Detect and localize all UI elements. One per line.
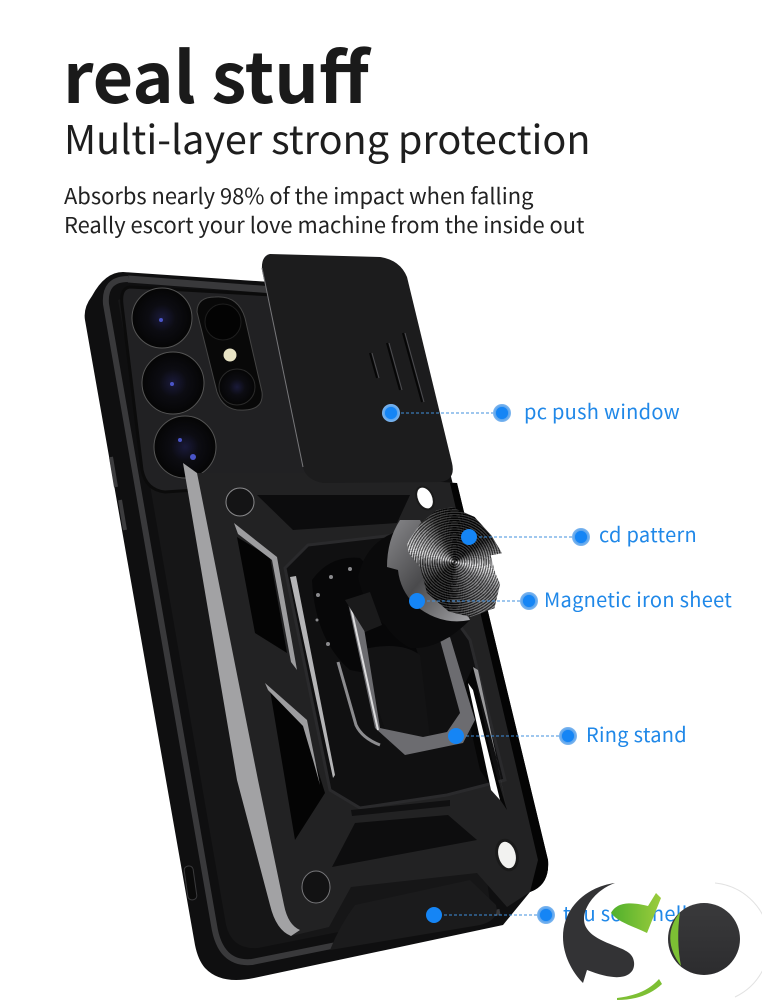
logo letter S xyxy=(563,883,634,983)
callout: pc push window: pc push window xyxy=(524,396,680,425)
trapezoid with hex pattern xyxy=(332,815,477,867)
side port xyxy=(184,865,197,900)
silver cap xyxy=(387,520,470,621)
callout: pc push window xyxy=(382,396,680,425)
logo green crescent xyxy=(670,912,681,966)
lens 3 xyxy=(154,416,216,478)
callout: ring stand xyxy=(448,719,687,748)
lens 2 xyxy=(142,352,204,414)
watermark logo xyxy=(563,883,762,1000)
description text: Absorbs nearly 98% of the impact when falling xyxy=(64,180,534,211)
lower left window xyxy=(270,690,325,840)
flash xyxy=(224,348,236,362)
silver left strip xyxy=(183,463,300,936)
hole bottom-right xyxy=(493,838,521,872)
case rim xyxy=(106,279,500,962)
cd pattern disc xyxy=(407,507,502,617)
screw top-left xyxy=(226,488,254,516)
screw bottom-left xyxy=(302,871,330,903)
case body xyxy=(85,272,548,980)
description text xyxy=(64,180,584,240)
top window xyxy=(257,495,410,530)
centre silver strip xyxy=(290,576,335,778)
hole top-right xyxy=(413,484,437,512)
left window xyxy=(237,537,287,653)
callout: magnetic iron sheet: Magnetic iron sheet xyxy=(544,584,732,613)
lens pill xyxy=(197,297,262,410)
ring mount cylinder xyxy=(358,533,470,648)
callout: cd pattern xyxy=(461,519,697,548)
logo circle xyxy=(668,903,740,975)
slide grip lines xyxy=(370,333,422,402)
plate xyxy=(183,463,548,936)
side buttons xyxy=(111,457,125,530)
right window xyxy=(462,667,507,810)
title: real stuff xyxy=(63,23,372,124)
inner silver curve xyxy=(338,662,380,745)
camera island xyxy=(122,287,340,492)
logo green swoosh xyxy=(617,979,662,1000)
callout: magnetic iron sheet xyxy=(409,584,732,613)
logo outer arc xyxy=(715,883,762,997)
bottom slider xyxy=(330,880,497,950)
callout: ring stand: Ring stand xyxy=(586,719,687,748)
subtitle: Multi-layer strong protection xyxy=(64,109,591,166)
logo leaf xyxy=(611,893,661,933)
lower bracket xyxy=(360,646,430,745)
lens reflections xyxy=(159,318,196,460)
push window slide xyxy=(262,254,453,483)
magnetic oval xyxy=(312,558,420,673)
centre octagon xyxy=(285,535,505,808)
ring stand xyxy=(348,603,475,755)
callout: tpu soft shell xyxy=(426,898,688,927)
description text: Really escort your love machine from the inside out xyxy=(64,209,584,240)
callout: cd pattern: cd pattern xyxy=(599,519,697,548)
phone case illustration xyxy=(85,254,548,980)
plate right black edge xyxy=(450,483,548,892)
callout: tpu soft shell: tpu soft shell xyxy=(563,898,688,927)
lens 1 xyxy=(132,288,192,348)
